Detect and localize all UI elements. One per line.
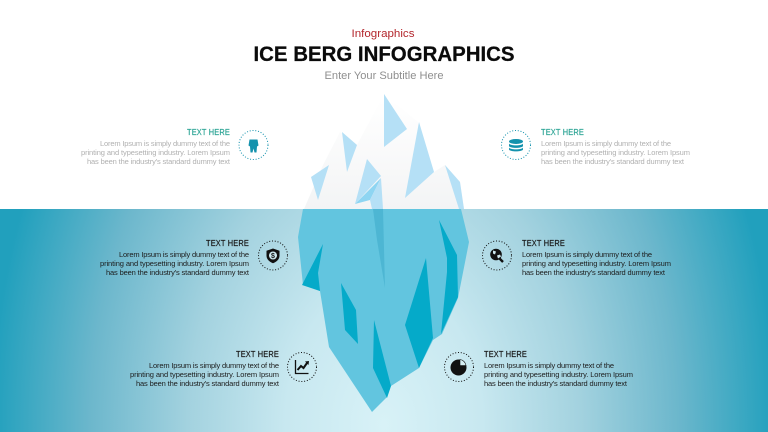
body text: printing and typesetting industry. Lorem Ipsum bbox=[484, 370, 633, 379]
heading: TEXT HERE bbox=[484, 349, 527, 359]
icon: pie chart bbox=[444, 352, 474, 382]
heading: TEXT HERE bbox=[206, 238, 249, 248]
body text: Lorem Ipsum is simply dummy text of the bbox=[522, 250, 652, 259]
body text: has been the industry's standard dummy text bbox=[522, 268, 666, 277]
callout: middle right bbox=[482, 238, 671, 277]
heading: TEXT HERE bbox=[541, 127, 584, 137]
body text: Lorem Ipsum is simply dummy text of the bbox=[484, 361, 614, 370]
body text: Lorem Ipsum is simply dummy text of the bbox=[100, 139, 230, 148]
sea background bbox=[0, 209, 768, 432]
title block bbox=[254, 28, 514, 82]
icon: people bbox=[239, 130, 268, 160]
iceberg above water bbox=[304, 94, 464, 209]
body text: printing and typesetting industry. Lorem Ipsum bbox=[541, 148, 690, 157]
body text: printing and typesetting industry. Lorem Ipsum bbox=[81, 148, 230, 157]
body text: printing and typesetting industry. Lorem Ipsum bbox=[130, 370, 279, 379]
body text: printing and typesetting industry. Lorem Ipsum bbox=[522, 259, 671, 268]
body text: has been the industry's standard dummy text bbox=[87, 157, 231, 166]
body text: has been the industry's standard dummy text bbox=[484, 379, 628, 388]
callout: bottom right bbox=[444, 349, 633, 388]
icon: line chart bbox=[288, 352, 316, 382]
icon: globe with magnifier bbox=[482, 241, 512, 270]
body text bbox=[484, 361, 633, 388]
callout: bottom left bbox=[130, 349, 316, 388]
body text bbox=[541, 139, 690, 166]
body text bbox=[130, 361, 280, 388]
body text: Lorem Ipsum is simply dummy text of the bbox=[541, 139, 671, 148]
body text: has been the industry's standard dummy text bbox=[541, 157, 685, 166]
subtitle: Enter Your Subtitle Here bbox=[324, 70, 444, 82]
callout: top left bbox=[81, 127, 268, 166]
icon: shield with dollar: $ bbox=[271, 253, 275, 260]
icon: shield with dollar bbox=[258, 241, 288, 270]
body text: Lorem Ipsum is simply dummy text of the bbox=[119, 250, 249, 259]
callout: middle left bbox=[100, 238, 288, 277]
body text: Lorem Ipsum is simply dummy text of the bbox=[149, 361, 279, 370]
iceberg below water bbox=[298, 209, 469, 412]
main title: ICE BERG INFOGRAPHICS bbox=[254, 43, 514, 66]
heading: TEXT HERE bbox=[187, 127, 230, 137]
body text: printing and typesetting industry. Lorem Ipsum bbox=[100, 259, 249, 268]
heading: TEXT HERE bbox=[236, 349, 279, 359]
body text: has been the industry's standard dummy text bbox=[106, 268, 250, 277]
body text: has been the industry's standard dummy text bbox=[136, 379, 280, 388]
heading: TEXT HERE bbox=[522, 238, 565, 248]
callout: top right bbox=[502, 127, 690, 166]
body text bbox=[522, 250, 671, 277]
eyebrow label: Infographics bbox=[352, 28, 415, 40]
icon: database bbox=[502, 130, 530, 160]
body text bbox=[81, 139, 231, 166]
iceberg illustration bbox=[298, 94, 469, 412]
body text bbox=[100, 250, 250, 277]
